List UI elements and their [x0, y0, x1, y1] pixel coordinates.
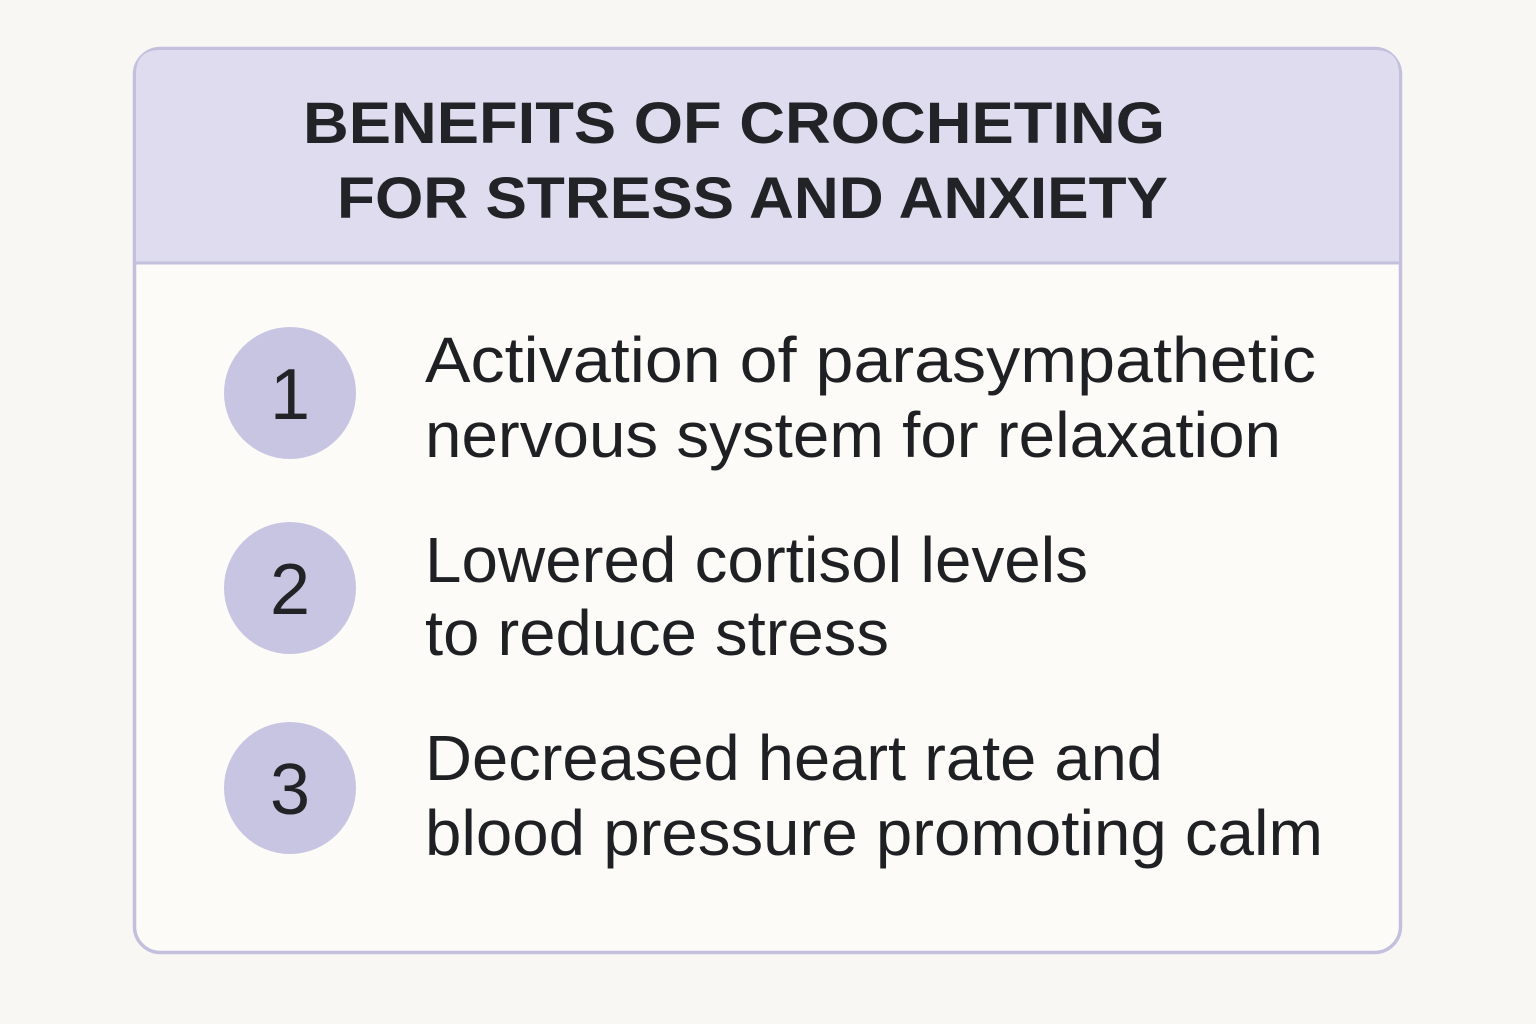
text: item 1: [425, 324, 1316, 471]
text: item 2: Lowered cortisol levels: [425, 524, 1088, 596]
title: [303, 91, 1168, 231]
panel: card: [134, 48, 1400, 952]
icon: number 2 circle: 2: [270, 550, 310, 630]
icon: number 2 circle: [224, 522, 356, 654]
text: item 3: Decreased heart rate and: [425, 722, 1163, 794]
item 3: [224, 722, 1323, 869]
text: item 2: to reduce stress: [425, 597, 889, 669]
text: item 3: [425, 722, 1323, 869]
item 1: [224, 324, 1316, 471]
icon: number 1 circle: [224, 327, 356, 459]
text: item 1: Activation of parasympathetic: [425, 324, 1316, 396]
title: BENEFITS OF CROCHETING: [303, 91, 1165, 156]
item 2: [224, 522, 1088, 669]
icon: number 1 circle: 1: [270, 355, 310, 435]
text: item 3: blood pressure promoting calm: [425, 797, 1323, 869]
text: item 2: [425, 524, 1088, 669]
title: FOR STRESS AND ANXIETY: [337, 166, 1168, 231]
header band: [136, 50, 1399, 263]
icon: number 3 circle: 3: [270, 750, 310, 830]
icon: number 3 circle: [224, 722, 356, 854]
text: item 1: nervous system for relaxation: [425, 399, 1281, 471]
